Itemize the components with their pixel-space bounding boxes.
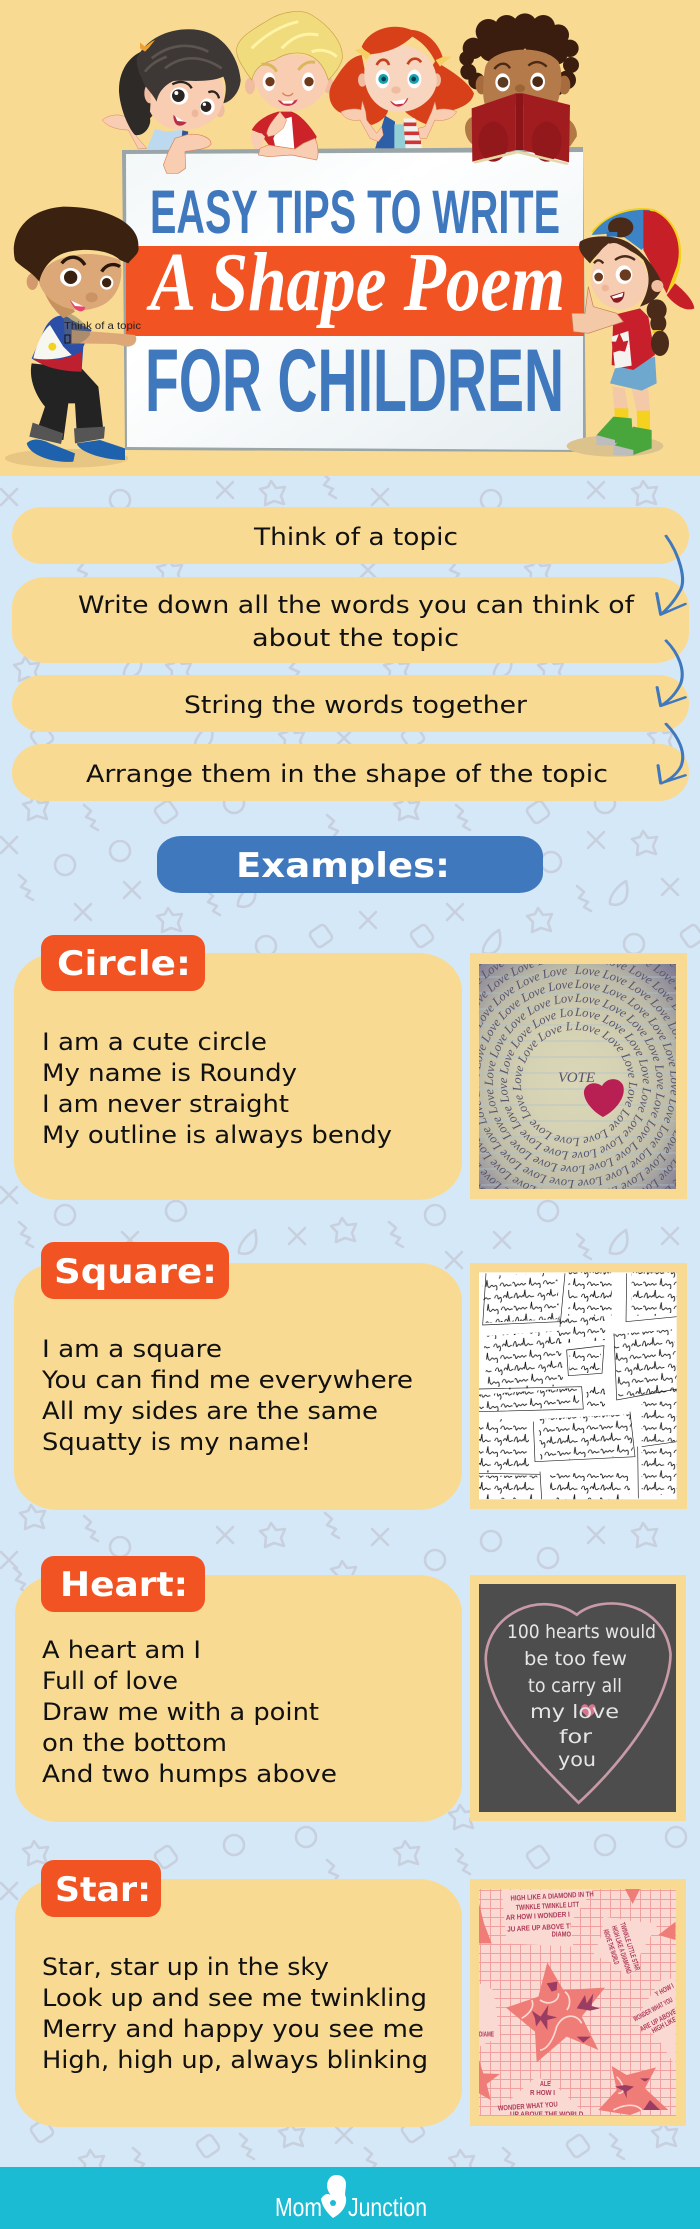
image: twinkle star paper: ALE: [540, 2079, 551, 2088]
tag: heart: Heart:: [60, 1565, 188, 1605]
image: twinkle star paper: R HOW I: [530, 2088, 555, 2097]
image: chalkboard heart: my love: [530, 1701, 619, 1723]
child: black haired girl: [102, 29, 241, 149]
image: chalkboard heart: to carry all: [528, 1675, 622, 1697]
child: blond boy: [237, 11, 342, 152]
image: circle shape poem: Love Love Love Love Love Love Love Love Love Love Love Love Love Love Love Love Love Love Love Love Love Love: [479, 980, 676, 1188]
stray label on boy's shirt: [64, 321, 141, 343]
MomJunction logo: [275, 2175, 427, 2222]
panel: step 3: [12, 675, 689, 732]
poem: star: Star, star up in the sky: [42, 1953, 329, 1981]
poem: square: You can find me everywhere: [41, 1366, 413, 1394]
image: twinkle star paper: ARE UP ABOVE: [638, 2007, 678, 2033]
image: twinkle star paper: UP ABOVE THE WORLD: [510, 2110, 583, 2119]
poem: circle: My outline is always bendy: [42, 1121, 392, 1149]
panel: step 3: String the words together: [184, 691, 527, 719]
poem: heart: [42, 1636, 337, 1788]
tag: star: Star:: [55, 1870, 151, 1910]
image: twinkle star paper: AR HOW I WONDER I: [506, 1910, 570, 1922]
tag: circle: Circle:: [57, 944, 191, 984]
tag: square: Square:: [54, 1252, 217, 1292]
arms resting on board: [163, 134, 318, 173]
image: twinkle star paper: Y HOW I: [653, 1981, 675, 1998]
panel: step 1: Think of a topic: [253, 523, 458, 551]
poem: star: Merry and happy you see me: [42, 2015, 424, 2043]
poem: heart: Draw me with a point: [42, 1698, 319, 1726]
arrow: step 1 to 2: [657, 536, 685, 615]
child: girl with cap at right of board: [567, 210, 694, 457]
image: twinkle star paper: TWINKLE TWINKLE LITT: [516, 1900, 580, 1912]
image: chalkboard heart: [470, 1575, 686, 1821]
red open book: [472, 93, 570, 165]
panel: step 4: [12, 744, 689, 801]
panel: step 1: [12, 507, 689, 564]
panel: step 2: [12, 577, 689, 663]
poem: star: Look up and see me twinkling: [42, 1984, 427, 2012]
panel: star example: [15, 1860, 462, 2127]
image: chalkboard heart: for: [559, 1726, 592, 1748]
MomJunction logo: Junction: [348, 2192, 427, 2222]
white title board: [122, 147, 586, 452]
poem: square: [41, 1335, 413, 1456]
image: circle shape poem: Love Love Love Love Love Love Love Love Love Love Love Love Love Love Love Love Love Love Love: [484, 994, 664, 1174]
poem: square: I am a square: [42, 1335, 222, 1363]
arrow: step 2 to 3: [657, 641, 685, 706]
panel: circle example: [14, 935, 462, 1200]
poem: heart: on the bottom: [42, 1729, 227, 1757]
poem: heart: And two humps above: [42, 1760, 337, 1788]
footer bar: [0, 2167, 700, 2229]
child: boy at left of board: [5, 207, 139, 468]
image: circle shape poem: Love Love Love Love Love Love Love Love Love Love Love Love Love Love Love Love: [500, 1008, 651, 1160]
poem: circle: [42, 1028, 392, 1149]
arrow: step 3 to 4: [658, 724, 685, 783]
poem: circle: My name is Roundy: [42, 1059, 297, 1087]
image: circle shape poem: Love Love Love Love Love Love Love Love Love Love Love Love Love: [512, 1022, 638, 1146]
image: handwritten notes: [470, 1263, 687, 1509]
image: twinkle star paper: TWINKLE LITTLE STAR: [618, 1921, 642, 1972]
image: twinkle star paper: HIGH LIKE A DIAMOND IN TH: [510, 1889, 594, 1903]
examples heading: Examples:: [236, 846, 450, 886]
image: twinkle star paper: JU ARE UP ABOVE T: [507, 1921, 570, 1934]
tag: circle: [41, 935, 205, 991]
title line 2 script: A Shape Poem: [146, 236, 565, 329]
image: twinkle star paper: WONDER WHAT YOU: [632, 1995, 674, 2023]
poem: heart: A heart am I: [42, 1636, 201, 1664]
child: curly haired boy: [459, 13, 579, 147]
image: twinkle star paper: DIAME: [479, 2030, 494, 2039]
image: twinkle star paper: HIGH LIKE A DIAMOND: [610, 1925, 634, 1975]
stray label on boy's shirt: Think of a topic: [64, 321, 141, 332]
image: twinkle star paper: HIGH LIKE: [650, 2015, 678, 2035]
poem: star: [42, 1953, 428, 2074]
orange title band: [126, 246, 584, 336]
image: chalkboard heart: 100 hearts would: [507, 1621, 656, 1643]
poem: heart: Full of love: [42, 1667, 178, 1695]
panel: step 2: Write down all the words you can think of: [78, 591, 635, 619]
image: circle shape poem: Love Love Love Love Love Love Love Love Love Love Love Love Love Love Love Love Love Love Love Love Love Love Love Love Love: [479, 966, 676, 1189]
poem: circle: I am never straight: [42, 1090, 289, 1118]
tag: square: [41, 1242, 229, 1299]
image: twinkle star paper: DIAMO: [552, 1930, 571, 1939]
tag: star: [41, 1860, 161, 1917]
logo icon: [321, 2175, 346, 2218]
panel: square example: [14, 1242, 462, 1510]
poem: square: Squatty is my name!: [42, 1428, 311, 1456]
tag: heart: [41, 1556, 205, 1612]
image: chalkboard heart: you: [558, 1749, 596, 1771]
image: twinkle star paper: WONDER WHAT YOU: [498, 2099, 558, 2113]
examples heading: [157, 836, 543, 893]
panel: heart example: [15, 1556, 462, 1822]
panel: step 4: Arrange them in the shape of the topic: [86, 760, 608, 788]
hero banner: [0, 0, 700, 476]
image: chalkboard heart: be too few: [524, 1648, 627, 1670]
background doodle pattern: [1, 473, 700, 2174]
child: red haired girl: [329, 27, 474, 149]
image: twinkle star paper: ABOVE THE WORLD: [601, 1928, 621, 1965]
panel: step 2: about the topic: [252, 624, 459, 652]
MomJunction logo: Mom: [275, 2192, 322, 2222]
image: circle shape poem: VOTE: [558, 1070, 595, 1086]
poem: circle: I am a cute circle: [42, 1028, 267, 1056]
poem: star: High, high up, always blinking: [42, 2046, 428, 2074]
image: twinkle star paper: [470, 1879, 686, 2126]
poem: square: All my sides are the same: [42, 1397, 378, 1425]
